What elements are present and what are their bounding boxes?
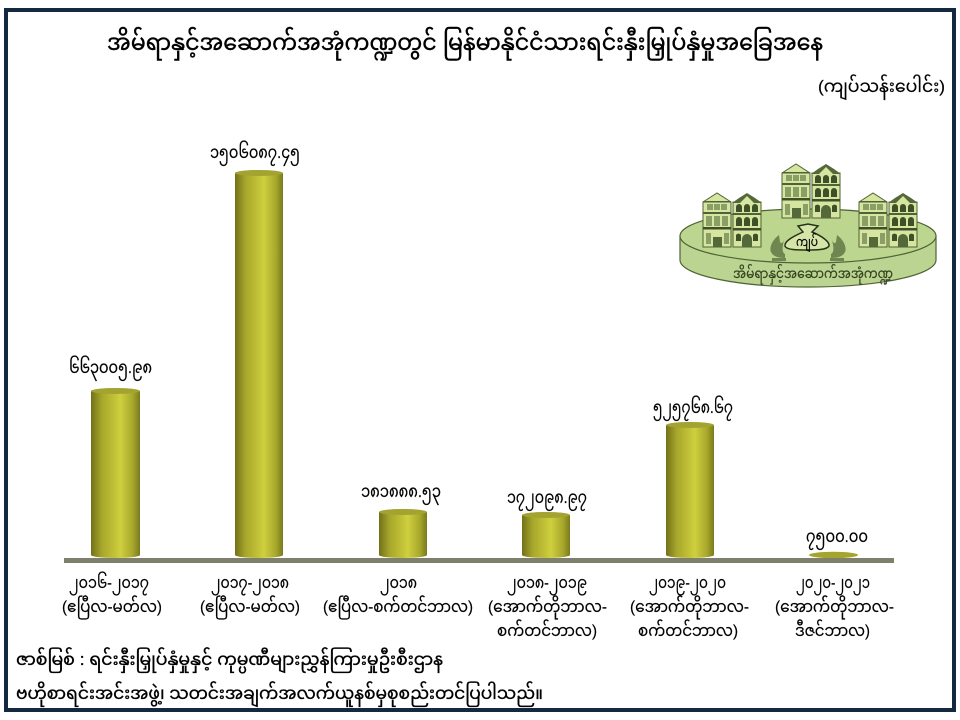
- category 5: စက်တင်ဘာလ): [638, 619, 738, 640]
- value 3: ၁၈၁၈၈၈.၅၃: [361, 482, 441, 505]
- category 6: [775, 575, 894, 640]
- value 6: ၇၅၀၀.၀၀: [806, 527, 868, 550]
- category 4: [488, 575, 607, 640]
- category 4: စက်တင်ဘာလ): [497, 619, 597, 640]
- illustration: housing and construction sector disc: အိမ်ရာနှင့်အဆောက်အအုံကဏ္ဍ: [733, 263, 893, 286]
- source note: ဗဟိုစာရင်းအင်းအဖွဲ့၊ သတင်းအချက်အလက်ယူနစ်မှစုစည်းတင်ပြပါသည်။: [16, 682, 543, 708]
- unit label: (ကျပ်သန်းပေါင်း): [818, 75, 945, 100]
- title: အိမ်ရာနှင့်အဆောက်အအုံကဏ္ဍတွင် မြန်မာနိုင်ငံသားရင်းနှီးမြှုပ်နှံမှုအခြေအနေ: [107, 26, 823, 62]
- bar 5: [666, 422, 714, 558]
- chart: bar columns: [64, 170, 894, 563]
- category 5: [630, 575, 749, 640]
- category 1: ၂၀၁၆-၂၀၁၇: [69, 571, 149, 596]
- source note: [16, 648, 543, 708]
- category 6: ဒီဇင်ဘာလ): [795, 619, 870, 640]
- category 5: ၂၀၁၉-၂၀၂၀: [649, 575, 726, 596]
- bar 1: [91, 388, 140, 558]
- category 3: [323, 575, 473, 620]
- axis: [64, 558, 894, 563]
- category 6: ၂၀၂၀-၂၀၂၁: [796, 575, 870, 596]
- value 5: ၅၂၅၇၆၈.၆၇: [653, 396, 733, 421]
- category 3: (ဧပြီလ-စက်တင်ဘာလ): [323, 595, 473, 620]
- category 6: (အောက်တိုဘာလ-: [775, 595, 894, 621]
- value 2: ၁၅၀၆၀၈၇.၄၅: [210, 141, 300, 166]
- data values: [69, 141, 868, 550]
- category 2: [200, 575, 300, 620]
- bar 3: [379, 509, 427, 558]
- category 5: (အောက်တိုဘာလ-: [630, 595, 749, 621]
- bar 6: [809, 552, 858, 558]
- category 3: ၂၀၁၈: [380, 575, 417, 596]
- value 1: ၆၆၃၀၀၅.၉၈: [69, 356, 152, 381]
- illustration: housing and construction sector disc: ကျပ်: [796, 233, 818, 252]
- category labels: [62, 571, 894, 640]
- source note: ဇာစ်မြစ် : ရင်းနှီးမြှုပ်နှံမှုနှင့် ကုမ္ပဏီများညွှန်ကြားမှုဦးစီးဌာန: [16, 648, 443, 674]
- value 4: ၁၇၂၀၉၈.၉၇: [507, 488, 587, 511]
- category 2: (ဧပြီလ-မတ်လ): [200, 595, 300, 620]
- category 4: ၂၀၁၈-၂၀၁၉: [507, 575, 587, 596]
- category 2: ၂၀၁၇-၂၀၁၈: [211, 575, 289, 596]
- category 1: [62, 571, 162, 620]
- bar 2: [235, 170, 283, 558]
- illustration: housing and construction sector disc: [680, 164, 936, 287]
- category 1: (ဧပြီလ-မတ်လ): [62, 595, 162, 620]
- category 4: (အောက်တိုဘာလ-: [488, 595, 607, 621]
- bar 4: [522, 512, 570, 558]
